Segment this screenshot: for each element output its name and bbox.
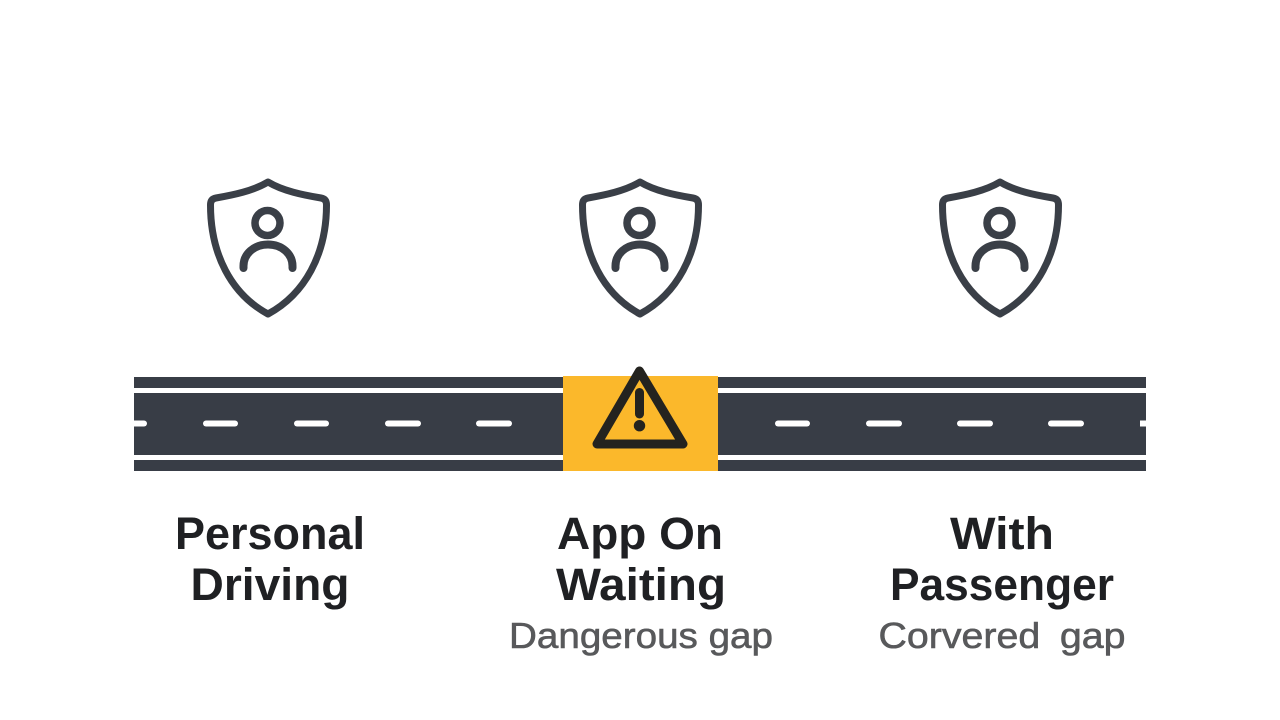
label: waiting: Waiting [556,559,726,610]
dangerous gap highlight [563,376,718,471]
label: driving: Driving [190,559,350,610]
caption: dangerous gap: Dangerous gap [509,615,773,656]
icon: shield with person, app on waiting [582,182,698,314]
caption: covered gap: Corvered gap [878,615,1126,656]
road timeline [130,377,1146,471]
label: passenger: Passenger [890,559,1114,610]
icon: shield with person, with passenger [942,182,1058,314]
icon: shield with person, personal driving [210,182,326,314]
label: app on: App On [557,508,723,559]
lane dashes [130,420,1146,426]
label: personal: Personal [175,508,365,559]
label: with: With [950,508,1054,559]
icon: warning triangle [597,371,683,444]
